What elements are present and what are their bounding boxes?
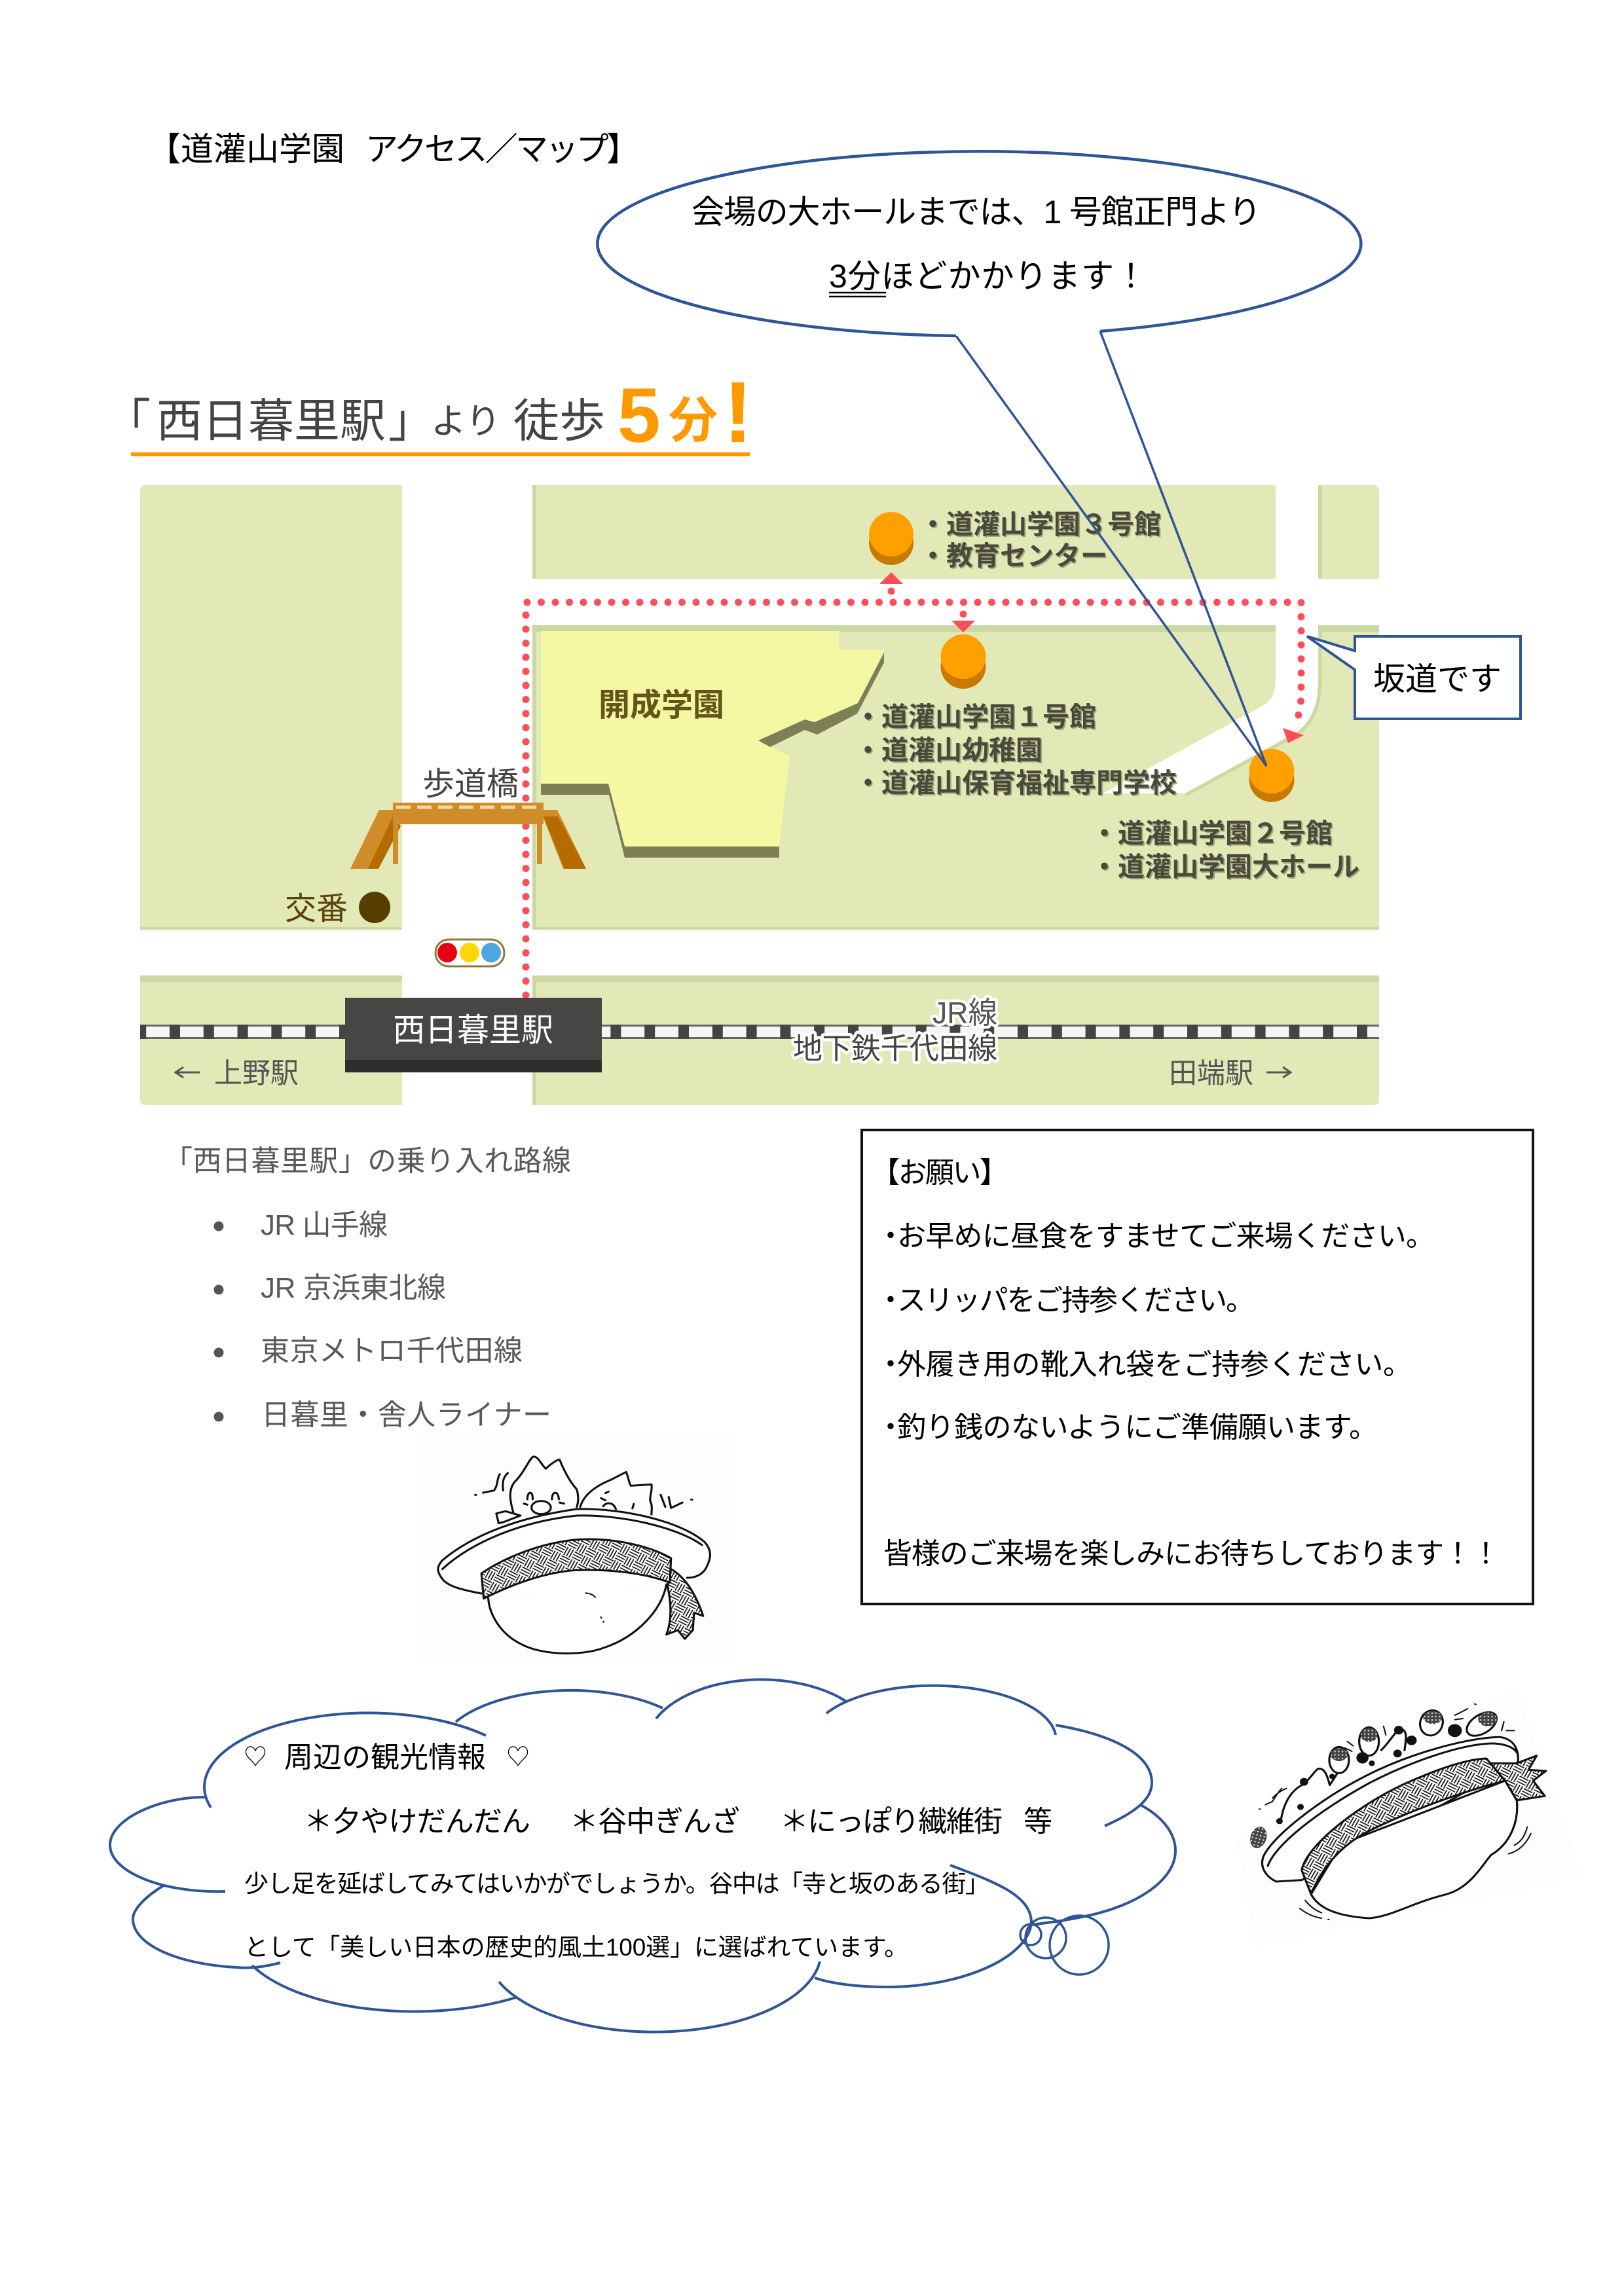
Kaisei footprint — [541, 631, 884, 847]
cloud spots: ＊谷中ぎんざ — [570, 1806, 740, 1838]
notice item 2: ・ — [876, 1285, 905, 1317]
climbers hair — [1247, 1711, 1497, 1850]
hat brim — [438, 1509, 710, 1594]
labels: building 2 group: ・道灌山学園大ホール — [1091, 852, 1359, 882]
map — [140, 485, 1379, 1105]
station box — [345, 998, 602, 1072]
labels: building 1 group: ・道灌山保育福祉専門学校 — [855, 768, 1177, 798]
line 3: 東京メトロ千代田線 — [261, 1335, 523, 1367]
bridge rail — [396, 805, 542, 809]
cloud spots: 等 — [1024, 1806, 1052, 1838]
marker: building 1 — [940, 634, 986, 689]
hat band — [481, 1539, 671, 1599]
crown marks — [585, 1593, 604, 1622]
fun: 分 — [669, 393, 718, 448]
cloud spots: ＊にっぽり繊維街 — [780, 1806, 1003, 1838]
line 2: JR 京浜東北線 — [261, 1272, 446, 1304]
label: JR line: JR線 — [932, 996, 997, 1030]
marker: building 3 — [869, 512, 913, 565]
police box dot — [359, 892, 390, 923]
Ueno station text: 上野駅 — [214, 1058, 299, 1089]
speech bubble: 3 minutes to the main hall — [597, 151, 1361, 766]
cloud heading: 周辺の観光情報 — [284, 1741, 486, 1774]
title school name: 【道灌山学園 — [148, 131, 344, 168]
heading station name: 西日暮里駅 — [157, 395, 386, 446]
labels: building 2 group: ・道灌山学園２号館 — [1091, 818, 1333, 848]
notice item 2: スリッパをご持参ください。 — [897, 1285, 1255, 1317]
map land — [140, 485, 1379, 1105]
labels: building 1 group: ・道灌山幼稚園 — [855, 735, 1043, 765]
arrow right — [1266, 1067, 1291, 1078]
cloud spots — [304, 1806, 1052, 1838]
climber bodies — [1281, 1728, 1406, 1822]
bridge posts — [393, 824, 398, 864]
bubble text line 1: 会場の大ホールまでは、1 号館正門より — [692, 194, 1261, 230]
label: to Tabata — [1169, 1058, 1291, 1089]
block edge shading — [140, 485, 1379, 1105]
motion marks — [475, 1473, 692, 1508]
bubble tail — [956, 331, 1266, 766]
climber dark tops — [1276, 1724, 1462, 1824]
cloud body line 2: として「美しい日本の歴史的風土100選」に選ばれています。 — [244, 1934, 908, 1961]
Tabata station text: 田端駅 — [1169, 1058, 1253, 1089]
heading closing bracket: 」 — [388, 395, 434, 446]
motion marks — [1259, 1704, 1531, 1920]
cloud body line 1: 少し足を延ばしてみてはいかがでしょうか。谷中は「寺と坂のある街」 — [244, 1870, 989, 1897]
notice item 4: 釣り銭のないようにご準備願います。 — [897, 1412, 1378, 1444]
walking route dotted line — [526, 602, 1301, 995]
arrow left — [175, 1067, 200, 1078]
station access lines list — [164, 1145, 571, 1431]
notice item 1: ・ — [876, 1220, 905, 1252]
hat crown — [1311, 1781, 1517, 1918]
curved sloped road — [1103, 625, 1318, 793]
labels: building 3 group — [919, 509, 1161, 571]
notice frame — [862, 1130, 1533, 1604]
line 4: 日暮里・舎人ライナー — [261, 1399, 551, 1431]
title — [148, 131, 639, 168]
label: Chiyoda subway line: 地下鉄千代田線 — [793, 1032, 997, 1065]
bridge legs — [350, 810, 396, 869]
route arrows — [879, 572, 1304, 743]
bubble text line 2: 3分ほどかかります！ — [829, 258, 1147, 295]
list heading: 「西日暮里駅」の乗り入れ路線 — [164, 1145, 571, 1177]
bridge deck — [393, 803, 544, 824]
ribbon tail — [667, 1569, 703, 1639]
labels: building 2 group — [1091, 818, 1359, 882]
double underline — [829, 293, 886, 297]
station box: 西日暮里駅 — [393, 1013, 553, 1048]
heading opening bracket: 「 — [105, 395, 151, 446]
exclamation: ! — [724, 364, 752, 460]
Kaisei label: 開成学園 — [599, 688, 724, 723]
callout: this is a slope — [1307, 636, 1521, 719]
callout text: 坂道です — [1373, 662, 1502, 697]
illustration: figures climbing a hat — [1236, 1689, 1582, 1946]
cloud heading: ♡ — [506, 1743, 530, 1770]
bubble ellipse — [597, 151, 1361, 336]
hat band — [1302, 1758, 1505, 1894]
line 1: JR 山手線 — [261, 1209, 388, 1241]
notice closing: 皆様のご来場を楽しみにお待ちしております！！ — [883, 1538, 1500, 1570]
notice heading: 【お願い】 — [871, 1157, 1008, 1189]
paw scrap — [496, 1511, 521, 1523]
pig left — [510, 1457, 578, 1514]
notice item 3: ・ — [876, 1349, 905, 1381]
labels: building 3 group: ・道灌山学園３号館 — [919, 509, 1161, 539]
Kaisei lower shadow — [541, 784, 779, 858]
thought bubbles — [1020, 1916, 1109, 1975]
railway tracks — [140, 1025, 1379, 1039]
label: to Ueno — [175, 1058, 299, 1089]
labels: building 1 group: ・道灌山学園１号館 — [855, 702, 1096, 732]
list bullets — [213, 1222, 224, 1422]
notice item 1: お早めに昼食をすませてご来場ください。 — [897, 1220, 1435, 1252]
hat brim — [1263, 1737, 1518, 1882]
map heading: walk 5 minutes from Nishi-Nippori — [105, 364, 752, 460]
building: Kaisei Gakuen — [541, 631, 884, 858]
notice item 4: ・ — [876, 1412, 905, 1444]
cloud spots: ＊夕やけだんだん — [304, 1806, 530, 1838]
hat crown — [489, 1584, 667, 1654]
pig right — [580, 1472, 652, 1514]
cloud heading: ♡ — [244, 1743, 267, 1770]
sloped road edge — [1186, 629, 1320, 795]
label: footbridge: 歩道橋 — [422, 767, 519, 802]
pedestrian bridge — [350, 803, 586, 869]
climbers heads — [1329, 1707, 1501, 1773]
illustration: pigs peeking over a hat — [423, 1436, 735, 1663]
labels: building 1 group — [855, 702, 1177, 798]
cloud outline arcs — [110, 1679, 1175, 2032]
ribbon tail — [1486, 1756, 1546, 1800]
Kaisei upper shadow — [758, 653, 884, 747]
marker: building 2 — [1249, 749, 1294, 802]
heading walk: 徒歩 — [513, 395, 605, 446]
label: police box: 交番 — [285, 892, 348, 926]
cloud: nearby sightseeing — [110, 1679, 1175, 2032]
title access map: アクセス／マップ】 — [365, 131, 639, 168]
big 5: 5 — [618, 373, 661, 459]
heading yori: より — [431, 402, 501, 441]
labels: building 3 group: ・教育センター — [919, 541, 1107, 571]
heading underline — [131, 452, 750, 456]
roads — [140, 485, 1379, 1105]
notice box — [862, 1130, 1533, 1604]
callout pointer and box — [1307, 636, 1521, 719]
notice item 3: 外履き用の靴入れ袋をご持参ください。 — [897, 1349, 1412, 1381]
traffic signal — [435, 939, 504, 966]
